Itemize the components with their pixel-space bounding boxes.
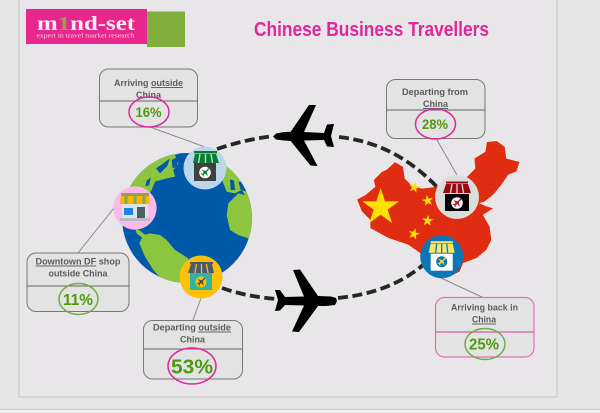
icon: store arriving back in China bbox=[420, 235, 463, 278]
callout: downtown DF shop: Downtown DF shop bbox=[36, 256, 121, 268]
callout: departing outside China: 53% bbox=[171, 356, 213, 378]
icon: store departing outside China bbox=[180, 256, 222, 298]
callout: departing from China: Departing from bbox=[402, 87, 468, 98]
callout: arriving outside China: Arriving outside bbox=[114, 78, 183, 89]
callout: departing outside China bbox=[144, 320, 242, 384]
callout: departing outside China: China bbox=[180, 334, 206, 346]
icon: plane top bbox=[273, 105, 334, 166]
callout: arriving back in China bbox=[436, 298, 534, 360]
callout: downtown DF shop bbox=[27, 253, 129, 314]
callout: arriving outside China bbox=[100, 69, 198, 127]
callout: departing from China: 28% bbox=[422, 117, 448, 132]
china flag stars bbox=[362, 180, 434, 240]
callout: downtown DF shop: 11% bbox=[63, 292, 93, 309]
logo: mind-set: m1nd-set bbox=[37, 13, 135, 35]
callout: departing from China: China bbox=[423, 99, 449, 110]
china map bbox=[357, 141, 520, 275]
flight path dashed arcs bbox=[217, 136, 437, 299]
logo: mind-set: expert in travel market research bbox=[36, 34, 134, 40]
globe bbox=[122, 153, 252, 283]
icon: store downtown bbox=[113, 186, 157, 230]
callout: downtown DF shop: outside China bbox=[48, 268, 108, 280]
icon: store arriving outside China bbox=[184, 146, 226, 190]
icon: plane bottom bbox=[275, 270, 337, 332]
callout: arriving outside China: China bbox=[136, 90, 162, 101]
callout: departing from China bbox=[386, 80, 485, 139]
title: Chinese Business Travellers bbox=[254, 19, 489, 41]
icon: store departing from China bbox=[435, 175, 479, 219]
callout: arriving back in China: 25% bbox=[469, 336, 499, 354]
callout: arriving outside China: 16% bbox=[136, 105, 162, 120]
callout: departing outside China: Departing outside bbox=[153, 322, 231, 334]
leader lines bbox=[78, 127, 484, 320]
callout: arriving back in China: China bbox=[472, 314, 497, 326]
callout: arriving back in China: Arriving back in bbox=[451, 302, 518, 314]
logo: mind-set bbox=[26, 9, 185, 47]
